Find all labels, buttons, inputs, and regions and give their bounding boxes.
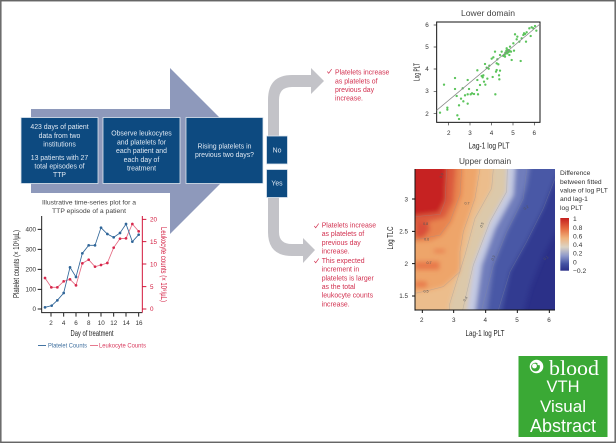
box: observe leukocytes and platelets: each day of: [124, 157, 159, 164]
legend title: log PLT: [560, 205, 583, 212]
finding: no branch: increase.: [335, 96, 363, 103]
heatmap tick labels: 6: [547, 317, 551, 324]
scatter tick labels: 4: [490, 130, 494, 137]
heatmap tick labels: 2: [420, 317, 424, 324]
box: patient data: 13 patients with 27: [31, 155, 88, 162]
box: observe leukocytes and platelets: [103, 118, 180, 184]
contour labels: 0.5: [479, 222, 485, 228]
right tick labels: [150, 216, 158, 313]
bottom tick labels: [49, 320, 143, 327]
main process arrow: [31, 68, 253, 234]
finding: yes branch: platelets is larger: [322, 275, 374, 282]
box: patient data: institutions: [43, 142, 76, 149]
scatter x axis title: Lag-1 log PLT: [468, 140, 510, 150]
scatter tick labels: 3: [425, 88, 429, 95]
legend title: value of log PLT: [560, 188, 608, 194]
legend title: [560, 170, 608, 212]
left tick labels: 200: [25, 266, 36, 273]
legend title: Difference: [560, 170, 591, 177]
finding: yes branch: increase.: [322, 248, 350, 256]
box: patient data: [21, 118, 98, 184]
finding: no branch: [327, 69, 390, 103]
box: observe leukocytes and platelets: treatment: [127, 166, 156, 173]
contour labels: 0.7: [426, 261, 432, 265]
heatmap tick labels: 3: [452, 317, 456, 324]
chart title: Illustrative time-series plot for a: [42, 199, 136, 206]
right tick labels: 0: [150, 306, 154, 313]
badge: blood VTH visual abstract: VTH: [546, 378, 580, 396]
left tick labels: [25, 226, 36, 313]
badge: blood VTH visual abstract: Abstract: [530, 416, 596, 436]
leukocyte series: [45, 224, 139, 287]
left axis title: Platelet counts (× 10⁹/µL): [11, 230, 21, 298]
finding: no branch: Platelets increase: [335, 70, 390, 77]
contour labels: 0.9: [439, 173, 444, 179]
box: rising platelets question: previous two days?: [195, 152, 254, 159]
contour lines: [415, 169, 555, 310]
contour labels: 0.5: [423, 290, 429, 294]
contour labels: [423, 173, 549, 302]
heatmap y axis title: Log TLC: [385, 226, 395, 250]
scatter title: Lower domain: [461, 8, 515, 18]
badge: blood VTH visual abstract: blood: [549, 356, 599, 380]
right axis title: Leukocyte counts (× 10⁹/µL): [159, 227, 169, 302]
box: no: [266, 136, 288, 164]
finding: no branch: previous day: [335, 87, 375, 94]
contour labels: 0.4: [462, 296, 469, 302]
finding: yes branch: as platelets of: [322, 231, 364, 238]
bottom tick labels: 14: [123, 320, 130, 327]
heatmap x axis title: Lag-1 log PLT: [466, 328, 504, 338]
box: patient data: 423 days of patient: [30, 124, 89, 131]
heatmap tick labels: 2: [404, 261, 408, 268]
contour labels: 0.7: [464, 202, 470, 206]
color bar labels: 0.4: [573, 242, 583, 249]
legend title: between fitted: [560, 179, 602, 186]
finding: yes branch: [314, 222, 376, 308]
heatmap tick labels: 4: [484, 317, 488, 324]
color bar labels: 0: [573, 259, 577, 266]
chart: lower domain scatter: [412, 8, 540, 150]
box: yes: Yes: [271, 181, 283, 188]
bottom tick labels: 2: [49, 320, 53, 327]
box: observe leukocytes and platelets: each patient and: [116, 148, 167, 155]
chart: upper domain heatmap: [385, 155, 608, 338]
finding: yes branch: increase.: [322, 301, 350, 308]
badge: blood VTH visual abstract: [518, 356, 608, 437]
contour labels: 0.2: [523, 205, 529, 211]
left tick labels: 100: [25, 286, 36, 293]
heatmap surface: [412, 169, 555, 313]
chart: time-series plot: [11, 199, 169, 350]
right tick labels: 15: [150, 239, 158, 246]
bottom tick labels: 8: [87, 320, 91, 327]
legend: Platelet Counts: [48, 343, 87, 350]
badge: blood VTH visual abstract: Visual: [540, 397, 586, 416]
scatter tick labels: 2: [425, 111, 429, 118]
scatter tick labels: 5: [511, 130, 515, 137]
color bar labels: 0.2: [573, 251, 583, 258]
contour labels: 0.8: [423, 222, 428, 226]
color bar: [560, 218, 569, 271]
scatter tick labels: 3: [468, 130, 472, 137]
heatmap title: Upper domain: [459, 156, 511, 166]
left tick labels: 400: [25, 226, 36, 234]
color bar labels: 1: [573, 216, 577, 223]
arrow: yes branch: [268, 196, 315, 263]
scatter frame and ticks: [434, 22, 540, 125]
box: observe leukocytes and platelets: Observe leukocytes: [111, 131, 172, 138]
finding: yes branch: leukocyte counts: [322, 293, 374, 300]
finding: yes branch: as the total: [322, 284, 356, 291]
color bar labels: 0.8: [573, 225, 583, 232]
chart title: TTP episode of a patient: [52, 208, 126, 215]
heatmap tick labels: [399, 196, 551, 324]
right tick labels: 10: [150, 261, 158, 268]
heatmap tick labels: 1.5: [399, 293, 408, 300]
bottom tick labels: 6: [74, 320, 78, 327]
scatter tick labels: 4: [425, 66, 429, 73]
arrow: no branch: [268, 68, 324, 137]
scatter tick labels: [425, 22, 537, 137]
x axis title: Day of treatment: [70, 328, 114, 338]
heatmap tick labels: 5: [515, 317, 519, 324]
box: rising platelets question: [186, 118, 263, 184]
heatmap tick labels: 2.5: [399, 228, 408, 235]
right tick labels: 20: [150, 216, 158, 224]
bottom tick labels: 16: [135, 320, 143, 327]
right tick labels: 5: [150, 284, 154, 291]
icon: blood logo: [530, 360, 543, 373]
left tick labels: 0: [32, 306, 36, 313]
box: observe leukocytes and platelets: and platelets for: [117, 139, 167, 146]
bottom tick labels: 12: [110, 320, 118, 327]
scatter tick labels: 5: [425, 44, 429, 51]
scatter tick labels: 2: [447, 130, 451, 137]
color bar labels: −0.2: [573, 268, 586, 275]
scatter points: [437, 24, 540, 119]
chart axes: [38, 216, 146, 317]
box: yes: [266, 170, 288, 198]
box: patient data: TTP: [53, 172, 66, 179]
scatter tick labels: 6: [425, 22, 429, 29]
scatter y axis title: Log PLT: [412, 63, 422, 81]
platelet series: [45, 224, 139, 307]
legend: Leukocyte Counts: [99, 343, 146, 350]
bottom tick labels: 10: [98, 320, 105, 327]
finding: yes branch: increment in: [322, 267, 359, 274]
color bar labels: [573, 216, 586, 275]
finding: yes branch: previous day: [322, 240, 361, 247]
box: rising platelets question: Rising platelets in: [197, 143, 252, 150]
finding: no branch: as platelets of: [335, 78, 378, 85]
color bar labels: 0.6: [573, 233, 583, 240]
heatmap tick labels: 3: [404, 196, 408, 204]
bottom tick labels: 4: [62, 320, 66, 327]
contour labels: 0.6: [424, 237, 429, 241]
scatter tick labels: 6: [533, 130, 537, 137]
legend title: and lag-1: [560, 196, 588, 203]
contour labels: 0.3: [491, 255, 496, 261]
contour labels: 0.1: [543, 255, 549, 261]
chart title: [42, 199, 136, 215]
heatmap axes: [412, 169, 555, 313]
left tick labels: 300: [25, 246, 36, 254]
box: no: No: [273, 148, 282, 155]
box: patient data: total episodes of: [34, 164, 85, 170]
legend: [38, 343, 146, 350]
finding: yes branch: Platelets increase: [322, 222, 376, 230]
box: patient data: data from two: [39, 133, 81, 140]
finding: yes branch: This expected: [322, 258, 365, 265]
